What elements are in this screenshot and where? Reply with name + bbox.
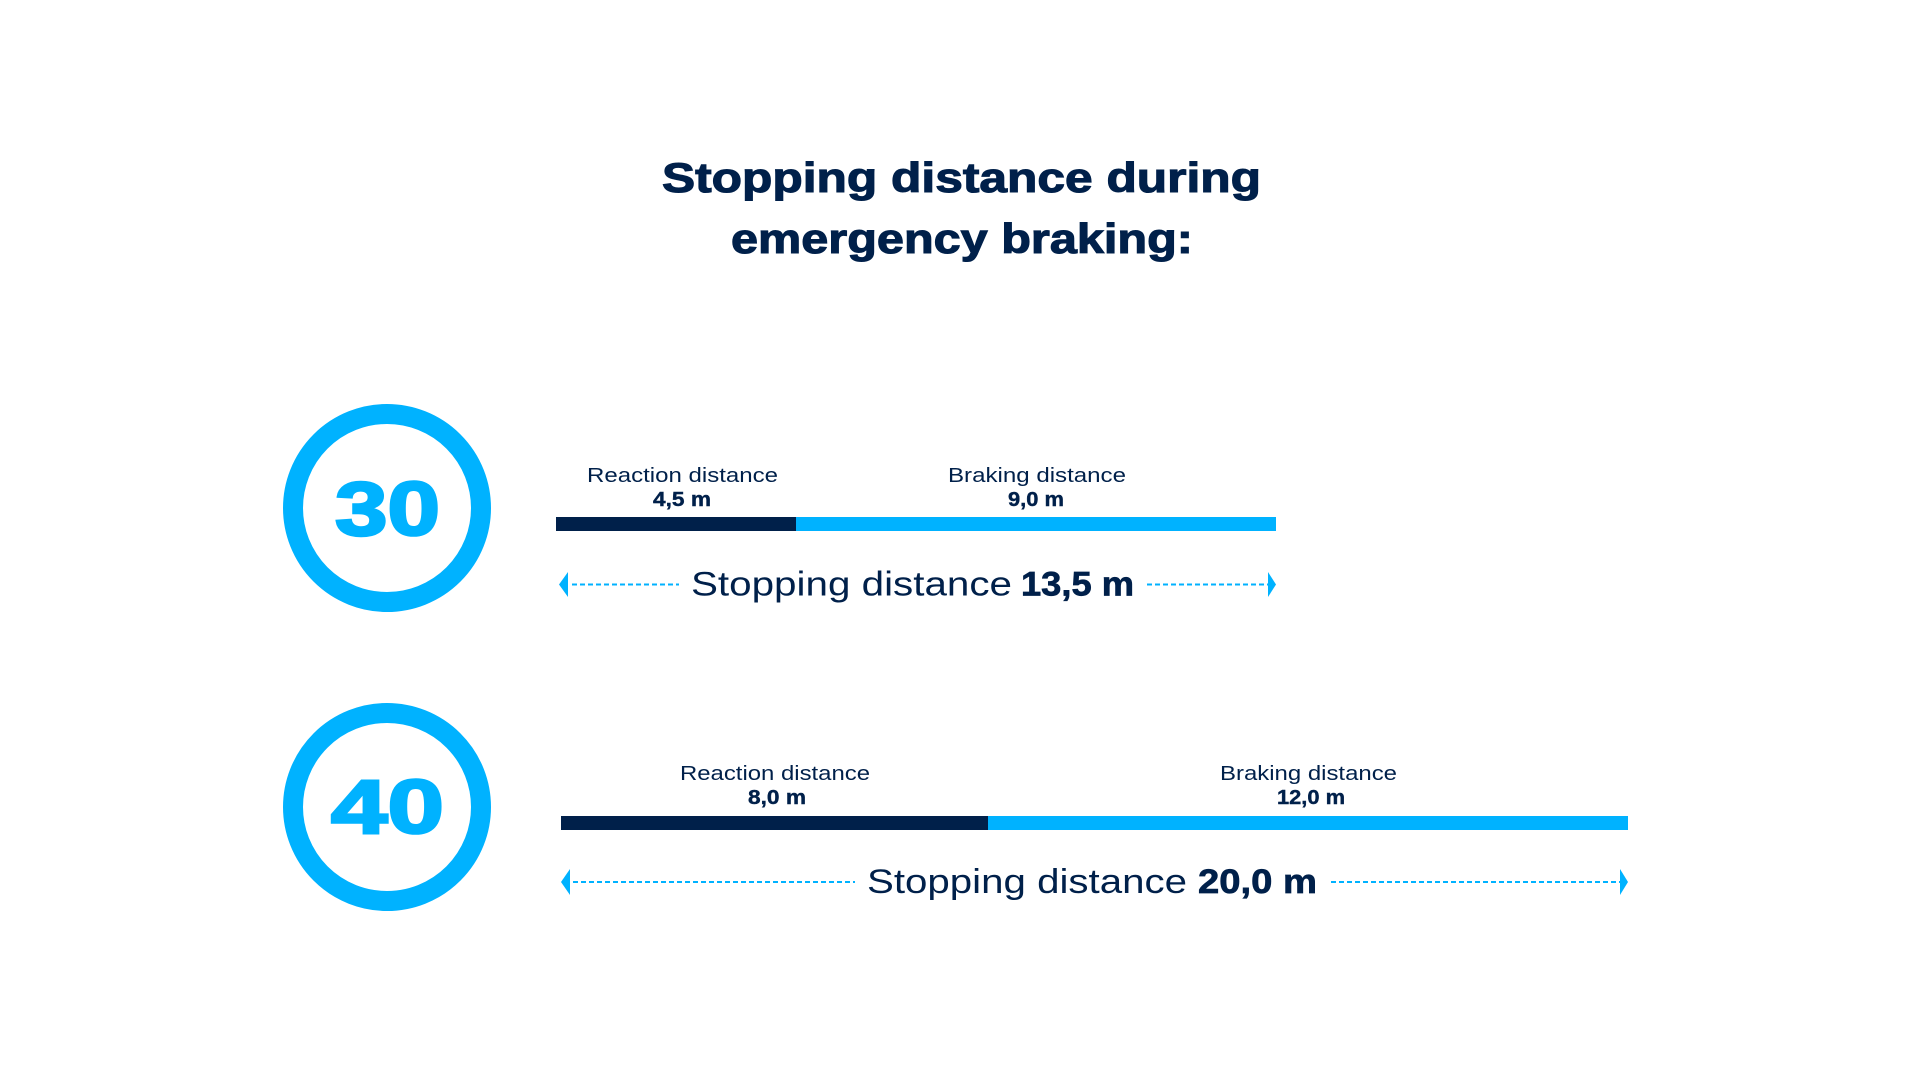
bar: reaction and braking segments bbox=[556, 517, 1276, 531]
total: stopping distance 13,5 m bbox=[691, 566, 1134, 604]
label: reaction distance 8,0 m bbox=[680, 763, 870, 809]
label: braking distance 9,0 m bbox=[948, 465, 1126, 511]
icon: speed sign 40: 40 bbox=[331, 765, 444, 850]
title bbox=[662, 154, 1261, 262]
label: braking distance 12,0 m: 12,0 m bbox=[1277, 787, 1345, 809]
arrow: right dashed bbox=[1147, 572, 1276, 597]
arrow: left dashed bbox=[559, 572, 679, 597]
label: reaction distance 4,5 m bbox=[587, 465, 778, 511]
label: reaction distance 8,0 m: Reaction distance bbox=[680, 763, 870, 785]
total: stopping distance 20,0 m bbox=[867, 863, 1317, 901]
label: braking distance 9,0 m: Braking distance bbox=[948, 465, 1126, 487]
panel: 30 km/h row bbox=[293, 414, 1276, 604]
title: emergency braking: bbox=[731, 215, 1193, 262]
label: reaction distance 8,0 m: 8,0 m bbox=[748, 787, 806, 809]
total: stopping distance 20,0 m: 20,0 m bbox=[1198, 863, 1317, 901]
label: braking distance 9,0 m: 9,0 m bbox=[1008, 489, 1064, 511]
icon: speed sign 30: 30 bbox=[335, 467, 440, 552]
total: stopping distance 13,5 m: Stopping distance bbox=[691, 566, 1012, 604]
arrow: right dashed bbox=[1331, 869, 1628, 895]
title: Stopping distance during bbox=[662, 154, 1261, 201]
arrow: left dashed bbox=[561, 869, 855, 895]
total: stopping distance 13,5 m: 13,5 m bbox=[1021, 566, 1134, 604]
total: stopping distance 20,0 m: Stopping distance bbox=[867, 863, 1187, 901]
label: braking distance 12,0 m: Braking distance bbox=[1220, 763, 1397, 785]
label: reaction distance 4,5 m: 4,5 m bbox=[653, 489, 711, 511]
icon: speed sign 30 bbox=[293, 414, 481, 602]
label: braking distance 12,0 m bbox=[1220, 763, 1397, 809]
bar: reaction and braking segments bbox=[561, 816, 1628, 830]
panel: 40 km/h row bbox=[293, 713, 1628, 901]
icon: speed sign 40 bbox=[293, 713, 481, 901]
label: reaction distance 4,5 m: Reaction distance bbox=[587, 465, 778, 487]
